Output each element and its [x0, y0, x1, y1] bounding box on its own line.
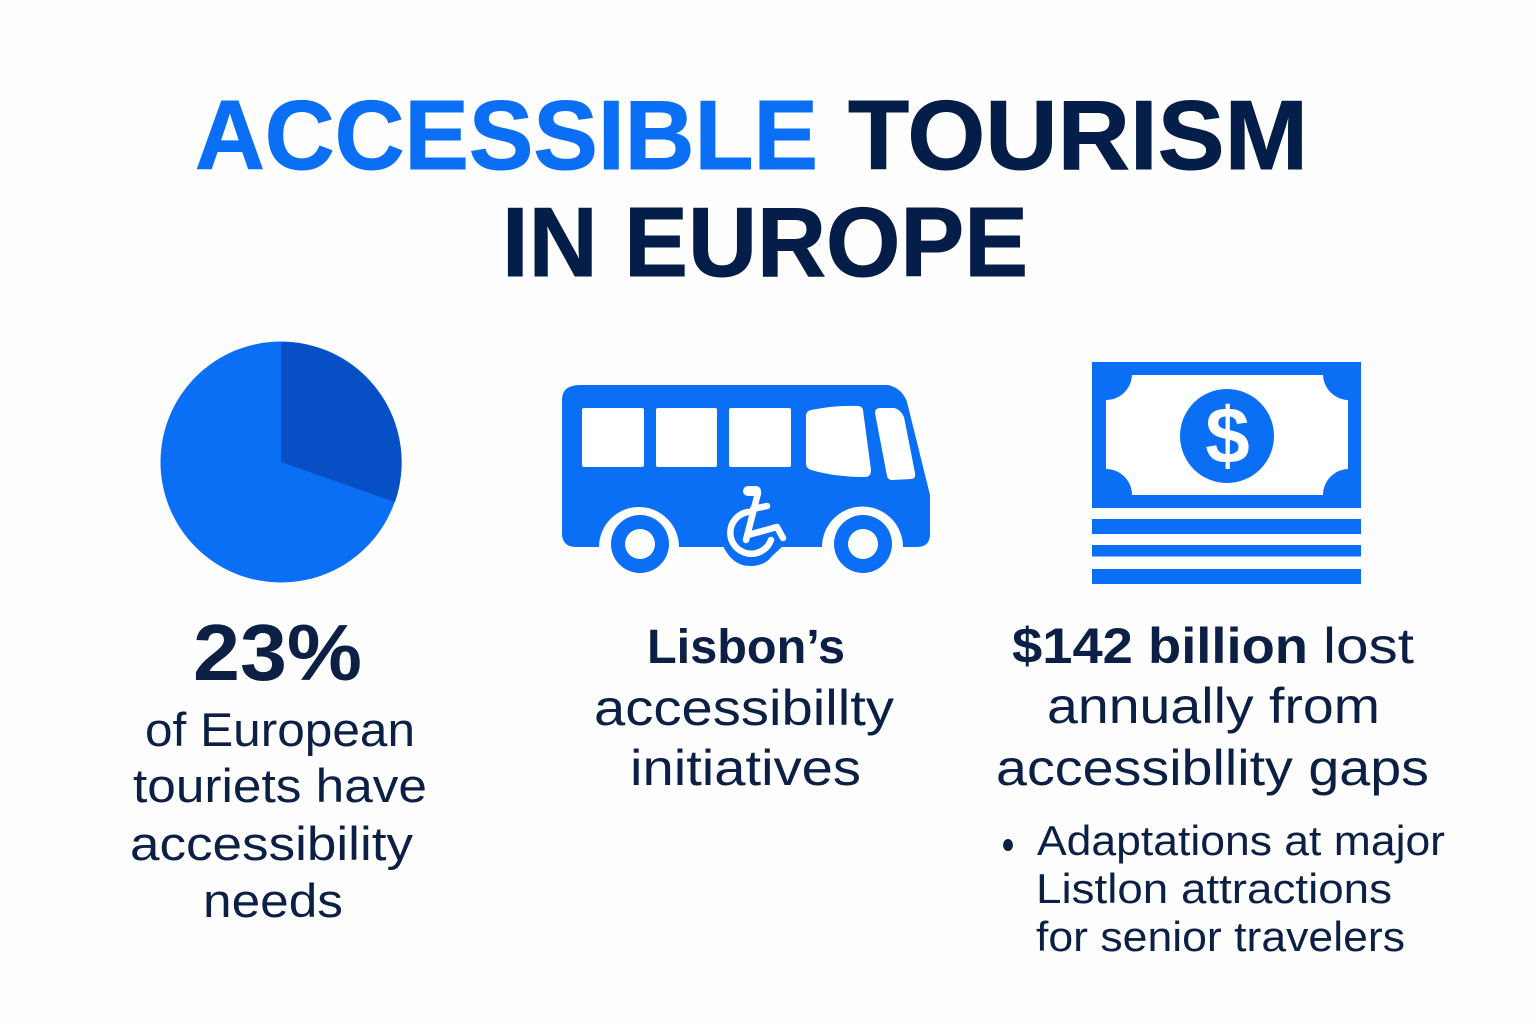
text: Lisbon's accessibility initiatives: initiatives: [630, 740, 861, 796]
text: Lisbon's accessibility initiatives: accessibillty: [594, 680, 894, 736]
title: [195, 80, 1308, 297]
bullet text: adaptations: Adaptations at major: [1037, 817, 1445, 864]
stat text: 23% of European tourists: accessibility: [130, 817, 414, 870]
stat text: $142 billion lost: lost: [1323, 618, 1414, 674]
icon: accessible bus: [562, 385, 930, 573]
bullet text: adaptations: [1003, 817, 1445, 960]
stat text: $142 billion lost: annually from: [1047, 678, 1380, 734]
title: IN EUROPE: [502, 187, 1028, 297]
bullet text: adaptations: for senior travelers: [1036, 913, 1405, 960]
stat text: $142 billion lost: accessibllity gaps: [996, 740, 1429, 796]
title: ACCESSIBLE: [195, 80, 818, 190]
stat text: 23% of European tourists: 23%: [193, 608, 362, 697]
pie chart: 23%: [160, 342, 402, 582]
wheelchair symbol: [723, 491, 783, 566]
wheel arches and wheels: [599, 506, 903, 573]
stat text: 23% of European tourists: [130, 608, 427, 927]
stat text: $142 billion lost: [996, 618, 1429, 796]
text: Lisbon's accessibility initiatives: [594, 621, 894, 796]
stat text: 23% of European tourists: of European: [145, 703, 415, 756]
icon: banknote stack: $: [1205, 391, 1250, 480]
stat text: $142 billion lost: $142 billion: [1012, 618, 1308, 674]
text: Lisbon's accessibility initiatives: Lisbon’s: [647, 621, 845, 674]
icon: banknote stack: [1092, 362, 1361, 584]
stat text: 23% of European tourists: needs: [203, 874, 343, 927]
title: TOURISM: [848, 80, 1308, 190]
bus windows: [582, 406, 915, 480]
bullet text: adaptations: Listlon attractions: [1036, 865, 1392, 912]
stat text: 23% of European tourists: touriets have: [133, 759, 427, 812]
